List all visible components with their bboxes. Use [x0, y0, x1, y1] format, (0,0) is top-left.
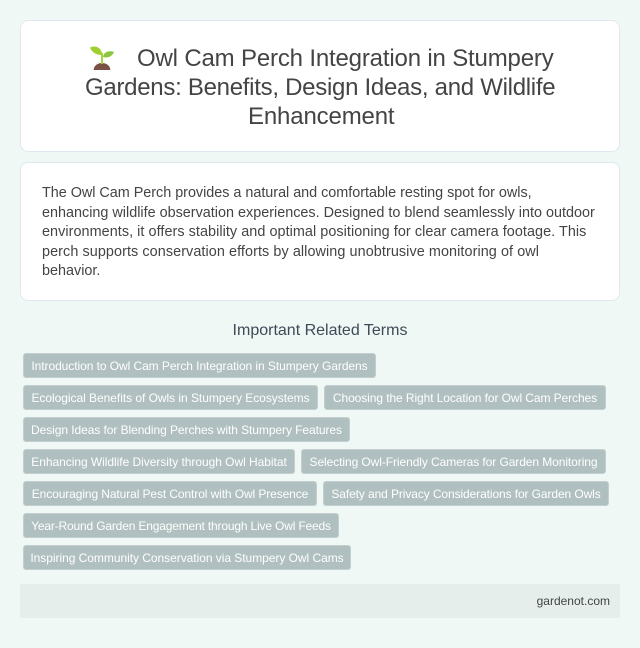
tag: Year-Round Garden Engagement through Live Owl Feeds	[31, 519, 331, 533]
text block: description: behavior.	[42, 263, 100, 279]
text block: description: The Owl Cam Perch provides a natural and comfortable resting spot for owls,	[42, 185, 532, 201]
text block: description: perch supports conservation efforts by allowing unobtrusive monitoring of owl	[42, 244, 539, 260]
tag: Choosing the Right Location for Owl Cam Perches	[333, 391, 597, 405]
panel: title card	[20, 20, 620, 152]
tag: Encouraging Natural Pest Control with Owl Presence	[32, 487, 308, 501]
tag	[23, 513, 339, 538]
tag: Introduction to Owl Cam Perch Integration in Stumpery Gardens	[31, 359, 368, 373]
tag: Enhancing Wildlife Diversity through Owl Habitat	[31, 455, 287, 469]
icon: seedling	[90, 46, 114, 70]
title: Gardens: Benefits, Design Ideas, and Wildlife	[85, 74, 555, 101]
tag	[324, 385, 606, 410]
tag: Selecting Owl-Friendly Cameras for Garden Monitoring	[310, 455, 597, 469]
tag	[301, 449, 606, 474]
title	[85, 45, 555, 130]
footer credit: gardenot.com	[537, 594, 610, 608]
tag	[23, 545, 351, 570]
tag list	[23, 353, 609, 570]
tag	[323, 481, 609, 506]
heading: related terms: Important Related Terms	[233, 322, 407, 339]
tag: Ecological Benefits of Owls in Stumpery Ecosystems	[31, 391, 310, 405]
tag: Inspiring Community Conservation via Stumpery Owl Cams	[30, 551, 344, 565]
footer bar	[20, 584, 620, 618]
panel: description	[20, 162, 620, 301]
tag	[23, 481, 317, 506]
title: Enhancement	[248, 103, 394, 130]
text block: description: enhancing wildlife observation experiences. Designed to blend seamlessly into outdoor	[42, 204, 595, 220]
tag	[23, 449, 295, 474]
tag	[23, 353, 376, 378]
tag	[23, 385, 318, 410]
tag: Design Ideas for Blending Perches with Stumpery Features	[31, 423, 342, 437]
text block: description	[42, 185, 595, 279]
title: Owl Cam Perch Integration in Stumpery	[137, 45, 554, 72]
tag	[23, 417, 350, 442]
text block: description: environments, it offers stability and optimal positioning for clear camera footage. This	[42, 224, 586, 240]
tag: Safety and Privacy Considerations for Garden Owls	[331, 487, 601, 501]
